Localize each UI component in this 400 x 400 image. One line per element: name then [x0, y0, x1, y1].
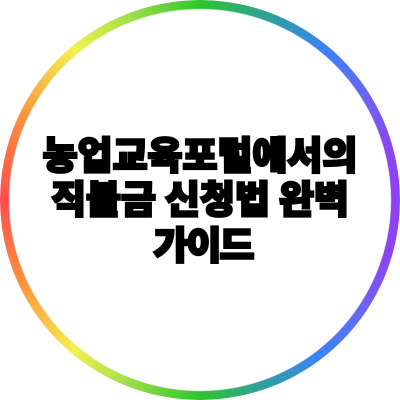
- title line 3: 가이드: [154, 226, 252, 268]
- title line 2: 직불금 신청법 완벽: [51, 180, 349, 222]
- title line 1: 농업교육포털에서의: [43, 136, 357, 178]
